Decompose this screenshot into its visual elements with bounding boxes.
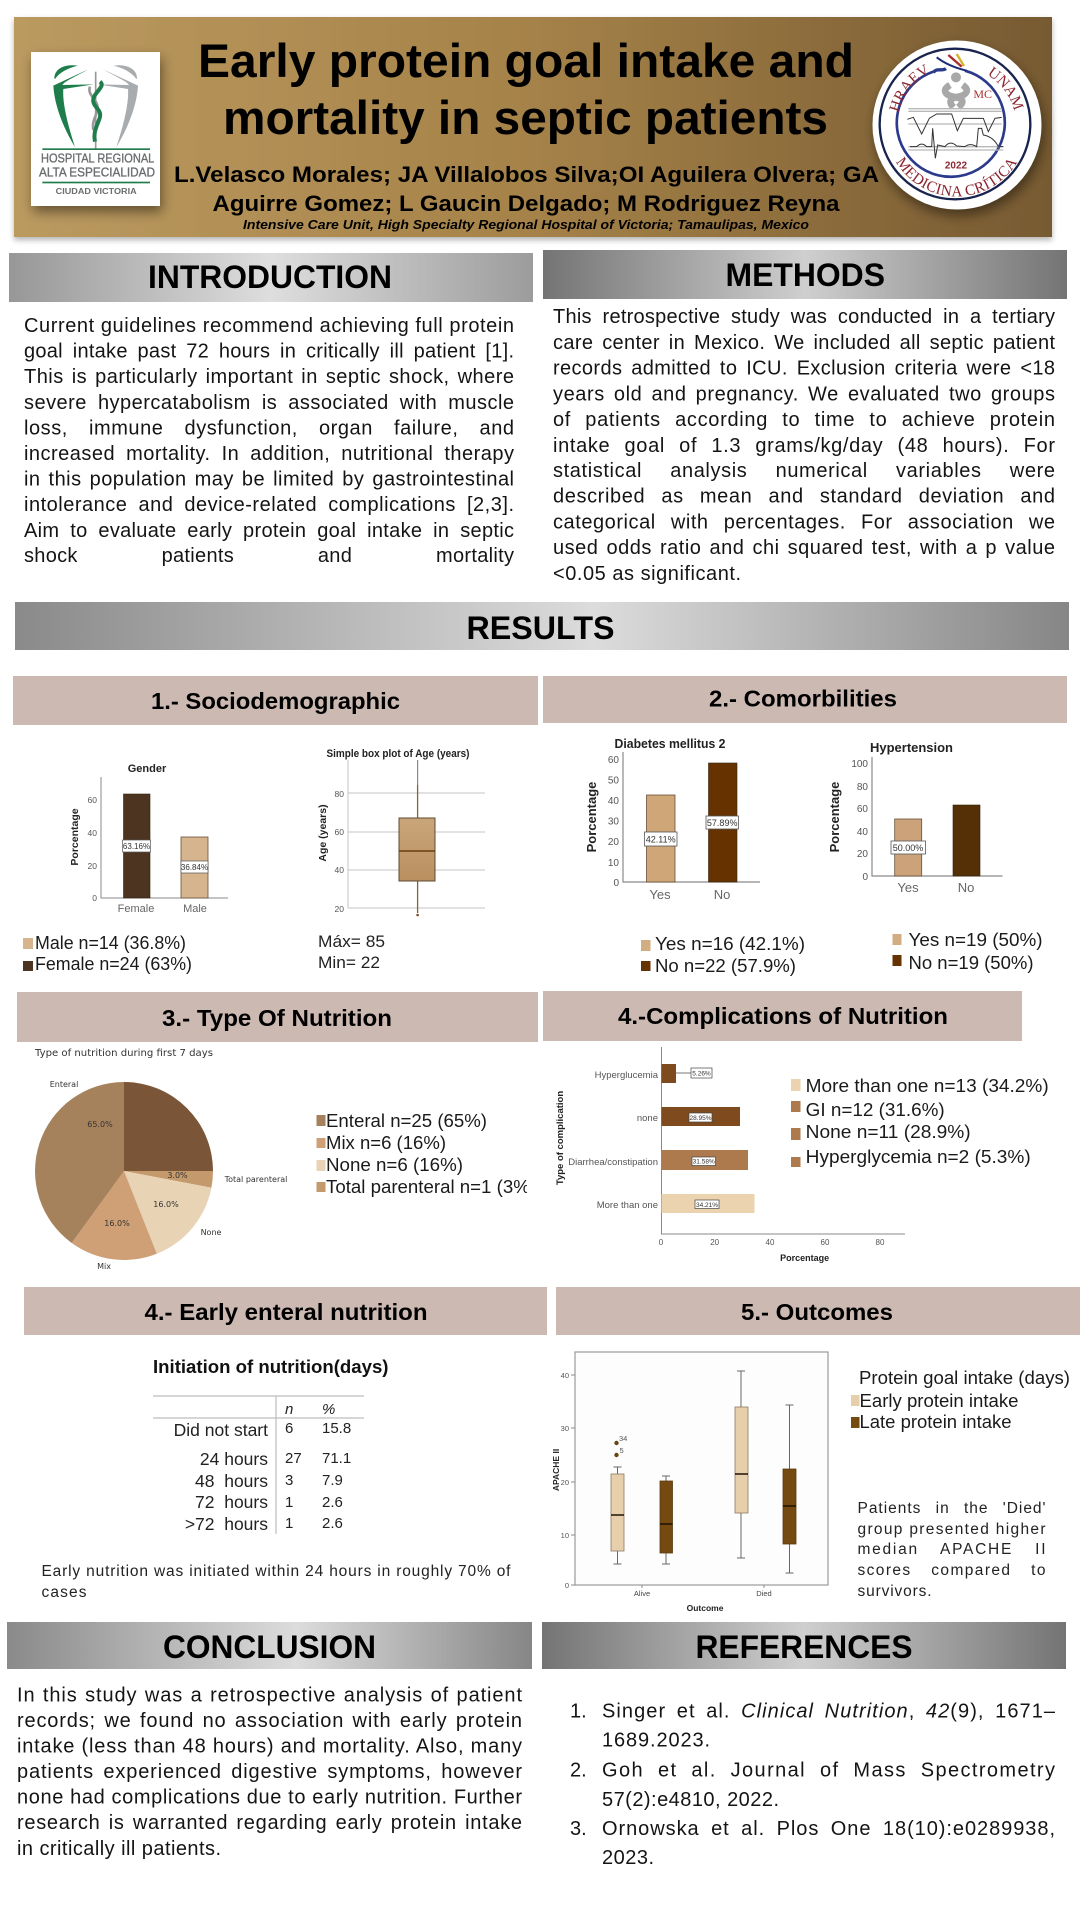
heading: results: RESULTS xyxy=(466,610,614,646)
bar chart: diabetes mellitus 2: 57.89% xyxy=(707,818,737,828)
reference list: Goh et al. Journal of Mass Spectrometry xyxy=(602,1760,1055,1782)
bar chart: diabetes mellitus 2: 0 xyxy=(613,878,619,889)
bar chart: hypertension: No xyxy=(958,880,974,895)
pie chart: type of nutrition: Enteral xyxy=(50,1080,78,1089)
text block: methods: statistical analysis numerical variables were xyxy=(553,460,1055,482)
bar chart: complications of nutrition: Hyperglucemia xyxy=(595,1070,659,1081)
bar chart: diabetes mellitus 2: 10 xyxy=(608,858,619,869)
text block: conclusion: intake (less than 48 hours) and mortality. Also, many xyxy=(17,1736,522,1758)
legend: hypertension: Yes n=19 (50%) xyxy=(908,930,1042,950)
table: initiation of nutrition: n xyxy=(285,1401,293,1418)
icon: critical care medicine seal xyxy=(868,40,1049,222)
subheading: comorbilities: 2.- Comorbilities xyxy=(709,686,897,712)
legend: diabetes xyxy=(641,934,805,976)
text block: introduction: loss, immune dysfunction, organ failure, and xyxy=(24,418,514,440)
title: mortality in septic patients xyxy=(223,91,828,144)
table: initiation of nutrition: 3 xyxy=(285,1472,293,1489)
bar chart: gender: Male xyxy=(183,903,207,915)
box plot: APACHE II by outcome xyxy=(551,1352,828,1613)
pie chart: type of nutrition: Total parenteral xyxy=(224,1175,287,1184)
box plot: APACHE II by outcome: 5 xyxy=(620,1446,624,1455)
text block: methods: years old and pregnancy. We evaluated two groups xyxy=(553,384,1055,406)
bar chart: complications of nutrition: 40 xyxy=(766,1238,775,1247)
bar chart: gender: 40 xyxy=(88,828,97,838)
bar chart: complications of nutrition: 34.21% xyxy=(696,1202,718,1209)
heading: references xyxy=(542,1622,1066,1669)
bar chart: hypertension: 40 xyxy=(857,827,868,838)
title xyxy=(198,34,854,144)
reference list: 2023. xyxy=(602,1847,654,1869)
text: APACHE note: Patients in the 'Died' xyxy=(858,1500,1046,1517)
text block: methods: <0.05 as significant. xyxy=(553,563,741,585)
table: initiation of nutrition xyxy=(153,1357,388,1534)
icon: critical care medicine seal: HRAEV xyxy=(889,64,926,112)
legend: protein goal intake: Protein goal intake (days) xyxy=(859,1368,1070,1388)
table: initiation of nutrition: >72 hours xyxy=(185,1514,268,1534)
legend: complications of nutrition xyxy=(791,1076,1049,1167)
authors: L.Velasco Morales; JA Villalobos Silva;OI Aguilera Olvera; GA xyxy=(174,162,879,187)
bar chart: hypertension: 20 xyxy=(857,849,868,860)
subheading: early enteral nutrition xyxy=(24,1287,547,1335)
text block: conclusion: none had complications due to early nutrition. Further xyxy=(17,1786,522,1808)
text block: introduction: This is particularly important in septic shock, where xyxy=(24,366,514,388)
table: initiation of nutrition: 1 xyxy=(285,1515,293,1532)
box plot: age: 40 xyxy=(335,865,344,875)
reference list: Ornowska et al. Plos One 18(10):e0289938, xyxy=(602,1818,1055,1840)
bar chart: complications of nutrition: 0 xyxy=(659,1238,664,1247)
table: initiation of nutrition: 48 hours xyxy=(195,1471,268,1491)
box plot: age: 80 xyxy=(335,789,344,799)
box plot: APACHE II by outcome: Died xyxy=(756,1589,772,1598)
text block: methods: categorical with percentages. For association we xyxy=(553,512,1055,534)
subheading: outcomes xyxy=(556,1287,1080,1335)
table: initiation of nutrition: 2.6 xyxy=(322,1515,343,1532)
text block: introduction: Current guidelines recommend achieving full protein xyxy=(24,315,514,337)
box plot: APACHE II by outcome: 20 xyxy=(561,1478,569,1487)
subheading: outcomes: 5.- Outcomes xyxy=(741,1299,893,1325)
text block: methods: This retrospective study was conducted in a tertiary xyxy=(553,306,1055,328)
box plot: APACHE II by outcome: Alive xyxy=(634,1589,650,1598)
table: initiation of nutrition: 6 xyxy=(285,1420,293,1437)
bar chart: gender: 0 xyxy=(92,893,97,903)
text block: methods: care center in Mexico. We included all septic patient xyxy=(553,332,1055,354)
table: initiation of nutrition: 15.8 xyxy=(322,1420,351,1437)
box plot: age: Age (years) xyxy=(317,804,329,862)
box plot: age: Simple box plot of Age (years) xyxy=(326,748,470,760)
bar chart: diabetes mellitus 2: 40 xyxy=(608,796,619,807)
heading: conclusion: CONCLUSION xyxy=(163,1629,376,1665)
heading: results xyxy=(15,602,1069,650)
icon: critical care medicine seal: MC xyxy=(973,87,992,101)
pie chart: type of nutrition: 16.0% xyxy=(153,1200,179,1209)
bar chart: complications of nutrition xyxy=(555,1047,905,1263)
subheading: comorbilities xyxy=(543,676,1067,723)
bar chart: diabetes mellitus 2: 42.11% xyxy=(646,834,676,844)
table: initiation of nutrition: 27 xyxy=(285,1450,302,1467)
bar chart: gender: Female xyxy=(118,903,154,915)
table: initiation of nutrition: Did not start xyxy=(174,1420,268,1440)
legend: gender xyxy=(23,933,192,974)
reference list: 3. xyxy=(570,1818,587,1840)
subheading: complications of nutrition: 4.-Complications of Nutrition xyxy=(618,1003,948,1029)
legend: type of nutrition xyxy=(316,1111,536,1197)
reference list: Singer et al. Clinical Nutrition, 42(9), 1671– xyxy=(602,1700,1056,1722)
icon: critical care medicine seal: 2022 xyxy=(945,161,968,172)
text block: methods: of patients according to time to achieve protein xyxy=(553,409,1055,431)
box plot: APACHE II by outcome: Outcome xyxy=(687,1603,724,1613)
text: early nutrition note: cases xyxy=(42,1584,87,1601)
pie chart: type of nutrition: 65.0% xyxy=(87,1120,113,1129)
text: age range: Máx= 85 xyxy=(318,933,385,951)
authors: Aguirre Gomez; L Gaucin Delgado; M Rodriguez Reyna xyxy=(212,191,840,216)
legend: complications of nutrition: GI n=12 (31.6%) xyxy=(806,1100,945,1120)
subheading: early enteral nutrition: 4.- Early enteral nutrition xyxy=(144,1299,428,1325)
text block: introduction: Aim to evaluate early protein goal intake in septic xyxy=(24,520,514,542)
bar chart: diabetes mellitus 2: 20 xyxy=(608,837,619,848)
bar chart: hypertension: 60 xyxy=(857,804,868,815)
text block: conclusion: patients experienced digestive symptoms, however xyxy=(17,1761,522,1783)
subheading: type of nutrition: 3.- Type Of Nutrition xyxy=(162,1005,392,1031)
bar chart: complications of nutrition: Porcentage xyxy=(780,1253,829,1263)
text: APACHE note: scores compared to xyxy=(858,1562,1046,1579)
bar chart: complications of nutrition: Type of complication xyxy=(555,1091,566,1185)
header banner xyxy=(10,16,1056,244)
legend: protein goal intake xyxy=(851,1368,1070,1432)
bar chart: hypertension: Hypertension xyxy=(870,740,953,755)
reference list: 1689.2023. xyxy=(602,1730,710,1752)
legend: type of nutrition: Enteral n=25 (65%) xyxy=(326,1111,487,1131)
bar chart: complications of nutrition: none xyxy=(637,1113,658,1124)
bar chart: diabetes mellitus 2: Diabetes mellitus 2 xyxy=(614,736,726,751)
text block: introduction: goal intake past 72 hours in critically ill patient [1]. xyxy=(24,340,514,362)
text: APACHE note: group presented higher xyxy=(858,1521,1046,1538)
text block: methods: records admitted to ICU. Exclusion criteria were <18 xyxy=(553,358,1055,380)
bar chart: gender: 63.16% xyxy=(123,842,150,851)
table: initiation of nutrition: 7.9 xyxy=(322,1472,343,1489)
box plot: age: 20 xyxy=(335,904,344,914)
pie chart: type of nutrition: 3.0% xyxy=(167,1171,188,1180)
affiliation: Intensive Care Unit, High Specialty Regional Hospital of Victoria; Tamaulipas, Mexico xyxy=(243,217,809,232)
text block: conclusion: records; we found no association with early protein xyxy=(17,1710,522,1732)
legend: complications of nutrition: None n=11 (28.9%) xyxy=(806,1122,971,1142)
text block: introduction: severe hypercatabolism is associated with muscle xyxy=(24,392,514,414)
bar chart: hypertension: Yes xyxy=(897,880,919,895)
text block: methods: intake goal of 1.3 grams/kg/day (48 hours). For xyxy=(553,435,1055,457)
heading: methods xyxy=(543,250,1067,299)
text: APACHE note: survivors. xyxy=(858,1583,932,1600)
text block: introduction: increased mortality. In addition, nutritional therapy xyxy=(24,443,514,465)
bar chart: gender: Gender xyxy=(128,763,167,775)
bar chart: hypertension: Porcentage xyxy=(827,782,842,852)
pie chart: type of nutrition: None xyxy=(201,1228,222,1237)
bar chart: complications of nutrition: 28.95% xyxy=(689,1115,712,1122)
legend: type of nutrition: Mix n=6 (16%) xyxy=(326,1133,446,1153)
heading: introduction xyxy=(9,253,533,302)
subheading: complications of nutrition xyxy=(543,991,1022,1041)
text block: introduction: shock patients and mortality xyxy=(24,545,514,567)
legend: complications of nutrition: More than one n=13 (34.2%) xyxy=(806,1076,1049,1096)
icon: hospital logo xyxy=(31,52,160,206)
text block: methods: described as mean and standard deviation and xyxy=(553,486,1055,508)
text block: conclusion: in critically ill patients. xyxy=(17,1838,221,1860)
bar chart: hypertension: 0 xyxy=(862,872,868,883)
reference list: 57(2):e4810, 2022. xyxy=(602,1789,779,1811)
table: initiation of nutrition: 1 xyxy=(285,1494,293,1511)
text block: introduction: in this population may be limited by gastrointestinal xyxy=(24,468,514,490)
title: Early protein goal intake and xyxy=(198,34,854,87)
pie chart: type of nutrition: Type of nutrition during first 7 days xyxy=(34,1048,213,1059)
legend: diabetes: No n=22 (57.9%) xyxy=(655,956,796,976)
bar chart: complications of nutrition: 60 xyxy=(821,1238,830,1247)
bar chart: gender: Porcentage xyxy=(69,808,81,866)
bar chart: hypertension: 50.00% xyxy=(893,843,923,853)
box plot: APACHE II by outcome: 40 xyxy=(561,1371,569,1380)
legend: gender: Male n=14 (36.8%) xyxy=(35,933,186,953)
text: early nutrition note xyxy=(42,1563,511,1601)
bar chart: diabetes mellitus 2: Yes xyxy=(649,887,671,902)
heading: introduction: INTRODUCTION xyxy=(148,259,392,295)
text block: introduction: intolerance and device-related complications [2,3]. xyxy=(24,494,514,516)
bar chart: complications of nutrition: 20 xyxy=(710,1238,720,1247)
subheading: type of nutrition xyxy=(17,992,538,1042)
bar chart: hypertension: 80 xyxy=(857,782,868,793)
text: APACHE note xyxy=(858,1500,1046,1600)
legend: diabetes: Yes n=16 (42.1%) xyxy=(655,934,805,954)
bar chart: complications of nutrition: 5.26% xyxy=(692,1070,711,1078)
bar chart: complications of nutrition: 80 xyxy=(876,1238,885,1247)
authors xyxy=(174,162,879,216)
bar chart: diabetes mellitus 2: No xyxy=(714,887,730,902)
box plot: APACHE II by outcome: APACHE II xyxy=(551,1449,561,1491)
bar chart: hypertension: 100 xyxy=(851,759,868,770)
bar chart: gender xyxy=(69,763,228,915)
box plot: age xyxy=(317,748,485,916)
box plot: age: 60 xyxy=(335,827,344,837)
icon: hospital logo: ALTA ESPECIALIDAD xyxy=(39,165,155,179)
legend: hypertension: No n=19 (50%) xyxy=(908,953,1034,973)
text: age range: Min= 22 xyxy=(318,954,380,972)
table: initiation of nutrition: Initiation of nutrition(days) xyxy=(153,1357,388,1377)
reference list: 2. xyxy=(570,1760,587,1782)
table: initiation of nutrition: 72 hours xyxy=(195,1492,268,1512)
box plot: APACHE II by outcome: 10 xyxy=(561,1531,569,1540)
box plot: APACHE II by outcome: 34 xyxy=(619,1434,627,1443)
legend: protein goal intake: Late protein intake xyxy=(860,1412,1012,1432)
text block: introduction xyxy=(24,315,514,567)
subheading: sociodemographic: 1.- Sociodemographic xyxy=(151,688,400,714)
bar chart: gender: 36.84% xyxy=(181,863,208,872)
text block: conclusion: research is warranted regarding early protein intake xyxy=(17,1812,522,1834)
bar chart: diabetes mellitus 2: 50 xyxy=(608,776,619,786)
text block: conclusion xyxy=(17,1684,522,1860)
legend: hypertension xyxy=(892,930,1042,973)
reference list: 1. xyxy=(570,1700,587,1722)
legend: gender: Female n=24 (63%) xyxy=(35,954,192,974)
text: age range xyxy=(318,933,385,972)
text block: methods: used odds ratio and chi squared test, with a p value xyxy=(553,537,1055,559)
legend: protein goal intake: Early protein intake xyxy=(860,1391,1018,1411)
bar chart: hypertension xyxy=(827,740,1002,895)
pie chart: type of nutrition: Mix xyxy=(97,1262,111,1271)
table: initiation of nutrition: 2.6 xyxy=(322,1494,343,1511)
pie chart: type of nutrition xyxy=(34,1048,287,1271)
table: initiation of nutrition: 71.1 xyxy=(322,1450,351,1467)
legend: complications of nutrition: Hyperglycemia n=2 (5.3%) xyxy=(806,1147,1031,1167)
table: initiation of nutrition: 24 hours xyxy=(200,1449,268,1469)
icon: critical care medicine seal: UNAM xyxy=(990,66,1024,111)
heading: references: REFERENCES xyxy=(696,1629,912,1665)
bar chart: diabetes mellitus 2: Porcentage xyxy=(584,782,599,852)
legend: type of nutrition: Total parenteral n=1 (3%) xyxy=(326,1177,536,1197)
text block: methods xyxy=(553,306,1055,585)
bar chart: gender: 20 xyxy=(88,861,97,871)
bar chart: diabetes mellitus 2: 60 xyxy=(608,755,619,766)
text: APACHE note: median APACHE II xyxy=(858,1541,1046,1558)
box plot: APACHE II by outcome: 30 xyxy=(561,1424,569,1433)
bar chart: complications of nutrition: 31.58% xyxy=(693,1158,715,1166)
icon: hospital logo: HOSPITAL REGIONAL xyxy=(41,151,154,165)
bar chart: complications of nutrition: Diarrhea/constipation xyxy=(568,1157,658,1168)
subheading: sociodemographic xyxy=(13,676,538,725)
pie chart: type of nutrition: 16.0% xyxy=(104,1219,130,1228)
table: initiation of nutrition: % xyxy=(322,1401,335,1418)
bar chart: diabetes mellitus 2: 30 xyxy=(608,816,619,828)
icon: critical care medicine seal: MEDICINA CRÍTICA xyxy=(896,156,1018,196)
bar chart: complications of nutrition: More than one xyxy=(597,1200,658,1211)
box plot: APACHE II by outcome: 0 xyxy=(565,1581,569,1590)
bar chart: gender: 60 xyxy=(88,795,97,805)
heading: conclusion xyxy=(7,1622,532,1669)
text block: conclusion: In this study was a retrospective analysis of patient xyxy=(17,1684,522,1706)
icon: hospital logo: CIUDAD VICTORIA xyxy=(56,187,137,196)
bar chart: diabetes mellitus 2 xyxy=(584,736,760,902)
text: early nutrition note: Early nutrition was initiated within 24 hours in roughly 70% of xyxy=(42,1563,511,1580)
reference list xyxy=(570,1700,1056,1869)
heading: methods: METHODS xyxy=(726,257,885,293)
legend: type of nutrition: None n=6 (16%) xyxy=(326,1155,463,1175)
